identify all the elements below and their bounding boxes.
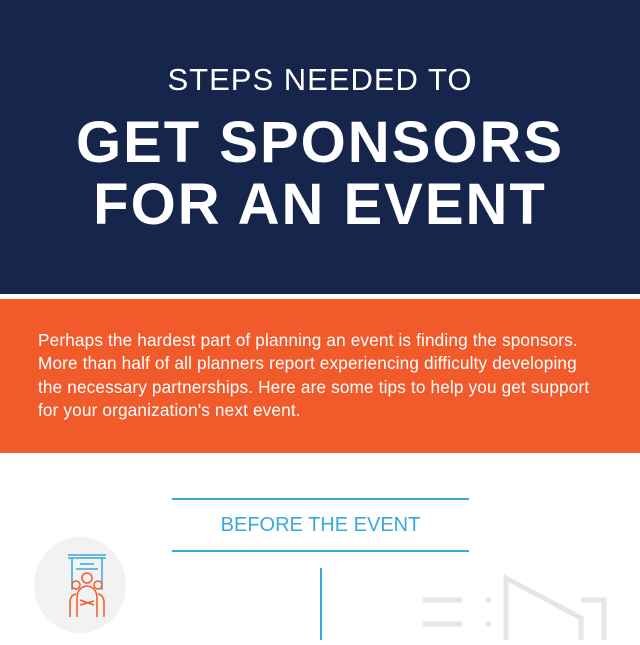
intro panel [0,299,640,453]
intro text [38,330,590,420]
main title [76,110,564,237]
main title: GET SPONSORS [76,110,564,175]
intro text: the necessary partnerships. Here are some tips to help you get support [38,377,589,397]
icon: document (faded) [423,574,606,640]
section heading: BEFORE THE EVENT [221,514,420,536]
icon: team presentation [34,537,126,633]
timeline line [320,568,322,640]
header panel [0,0,640,294]
intro text: Perhaps the hardest part of planning an event is finding the sponsors. [38,330,578,350]
subtitle: STEPS NEEDED TO [168,62,472,97]
section heading [172,498,469,552]
intro text: More than half of all planners report experiencing difficulty developing [38,353,577,373]
intro text: for your organization's next event. [38,400,301,420]
main title: FOR AN EVENT [93,172,547,237]
